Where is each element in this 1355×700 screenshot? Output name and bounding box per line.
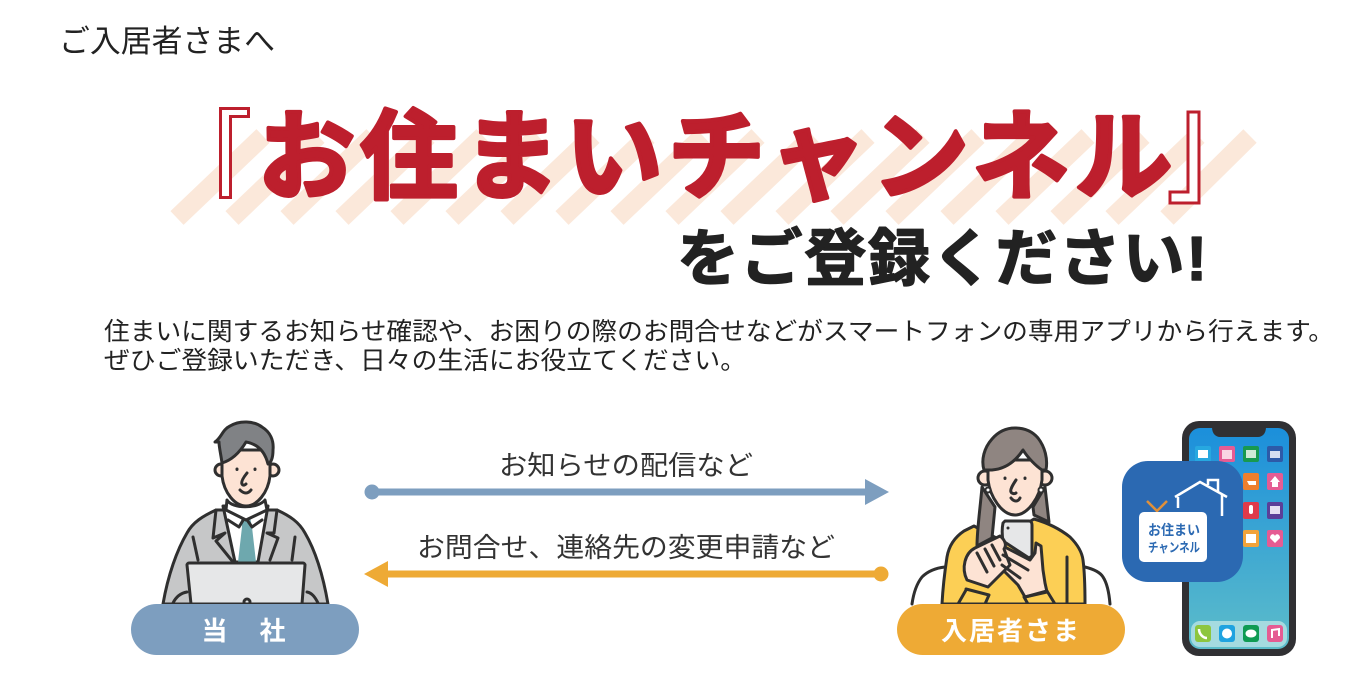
- app icon: [1122, 461, 1243, 582]
- woman: hair: [983, 428, 1047, 470]
- man: shirt: [223, 506, 268, 562]
- app icon: お住まい: [1148, 522, 1200, 538]
- man: neck: [226, 500, 267, 520]
- man: collar: [228, 517, 262, 527]
- man: laptop: [187, 563, 305, 604]
- man: tie: [238, 517, 256, 562]
- addressee label: ご入居者さまへ: [59, 24, 275, 59]
- phone notch: [1212, 427, 1266, 437]
- resident pill: [897, 604, 1125, 655]
- woman: cuffs and sleeve lines: [958, 557, 1067, 604]
- description text: ぜひご登録いただき、日々の生活にお役立てください。: [104, 347, 746, 375]
- subtitle: をご登録ください!: [677, 225, 1207, 294]
- man at laptop illustration: [163, 422, 328, 605]
- man: lapels: [173, 510, 318, 603]
- opening double bracket: [220, 108, 248, 198]
- description text: [104, 318, 1334, 375]
- woman: eyes and mouth: [1005, 478, 1025, 501]
- man: eyes and mouth: [237, 469, 255, 493]
- company pill: 当 社: [201, 616, 289, 646]
- woman: long hair: [977, 487, 1049, 546]
- woman: phone: [1002, 521, 1032, 558]
- resident pill: 入居者さま: [941, 616, 1081, 646]
- company pill: [131, 604, 359, 655]
- man: jacket: [163, 510, 328, 604]
- description text: 住まいに関するお知らせ確認や、お困りの際のお問合せなどがスマートフォンの専用アプリから行えます。: [104, 318, 1334, 346]
- smartphone: [1182, 421, 1296, 656]
- app grid: [1195, 446, 1283, 547]
- title: channel name: お住まいチャンネル: [258, 103, 1172, 212]
- app icon: チャンネル: [1148, 540, 1200, 555]
- woman with smartphone illustration: [912, 428, 1110, 604]
- arrow: notices to residents: [364, 451, 889, 505]
- woman: earrings: [986, 488, 990, 492]
- woman: sweater: [942, 519, 1085, 604]
- woman: head side bumps: [978, 471, 992, 485]
- background stripes: [177, 136, 1250, 218]
- woman: fingers: [977, 545, 1028, 578]
- arrow: inquiries to company: お問合せ、連絡先の変更申請など: [417, 533, 835, 563]
- closing double bracket: [1170, 112, 1199, 203]
- man: ears: [215, 464, 227, 476]
- woman: face: [988, 460, 1042, 515]
- man: face: [222, 450, 270, 506]
- woman: right hand: [997, 543, 1047, 597]
- arrow: notices to residents: お知らせの配信など: [499, 451, 753, 481]
- dock: [1191, 621, 1287, 647]
- woman: chair: [912, 567, 1110, 604]
- arrow: inquiries to company: [364, 533, 888, 587]
- man: hair: [215, 422, 273, 464]
- woman: left hand: [964, 536, 1010, 587]
